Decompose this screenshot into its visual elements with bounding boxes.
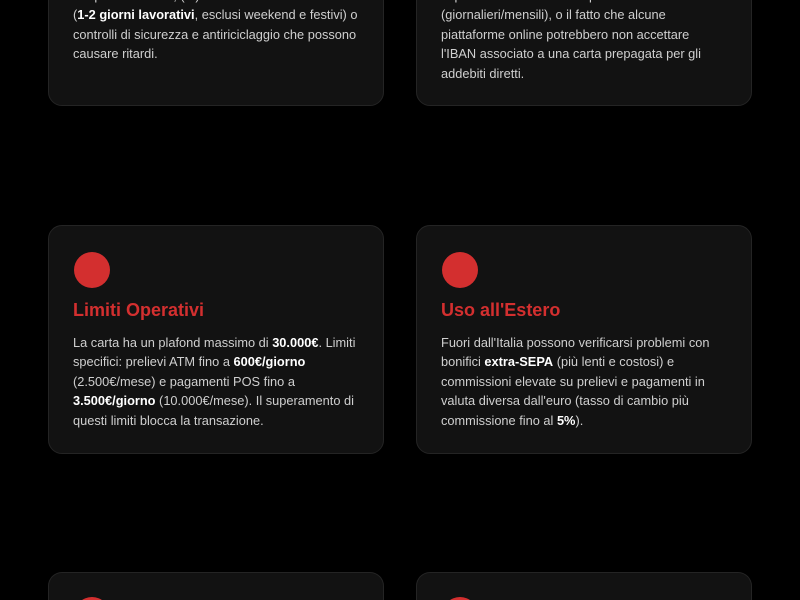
text: estero: commissioni elevate su prelievi e pagamenti in [441,374,705,389]
icon: red circle [74,597,110,600]
text: top left [73,0,358,61]
text: estero: bonifici extra-SEPA (più lenti e costosi) e [441,354,674,369]
panel: Limiti Operativi [48,225,384,454]
text: limiti: questi limiti blocca la transazione. [73,413,264,428]
panel: bottom right card [416,572,752,600]
heading: Uso all'Estero: Uso all'Estero [441,300,560,320]
text: limiti [73,335,355,428]
panel: Uso all'Estero [416,225,752,454]
text: limiti: La carta ha un plafond massimo di 30.000€. Limiti [73,335,355,350]
text: limiti: 3.500€/giorno (10.000€/mese). Il superamento di [73,393,354,408]
text: top right: piattaforme online potrebbero non accettare [441,27,689,42]
icon: red circle [74,252,110,288]
icon: red circle [442,597,478,600]
text: top right: l'IBAN associato a una carta prepagata per gli [441,46,701,61]
text: limiti: (2.500€/mese) e pagamenti POS fino a [73,374,295,389]
text: top left: causare ritardi. [73,46,158,61]
text: estero [441,335,709,428]
text: estero: Fuori dall'Italia possono verificarsi problemi con [441,335,709,350]
text: top right [441,0,701,81]
panel: bottom left card [48,572,384,600]
text: top right: addebiti diretti. [441,66,524,81]
icon: red circle [442,252,478,288]
heading: Limiti Operativi: Limiti Operativi [73,300,204,320]
text: top right: (giornalieri/mensili), o il fatto che alcune [441,7,666,22]
text: estero: commissione fino al 5%). [441,413,583,428]
text: top left: controlli di sicurezza e antiriciclaggio che possono [73,27,356,42]
text: top left: (1-2 giorni lavorativi, esclusi weekend e festivi) o [73,7,358,22]
panel: top left card [48,0,384,106]
panel: top right card [416,0,752,106]
text: estero: valuta diversa dall'euro (tasso di cambio più [441,393,689,408]
text: limiti: specifici: prelievi ATM fino a 600€/giorno [73,354,305,369]
